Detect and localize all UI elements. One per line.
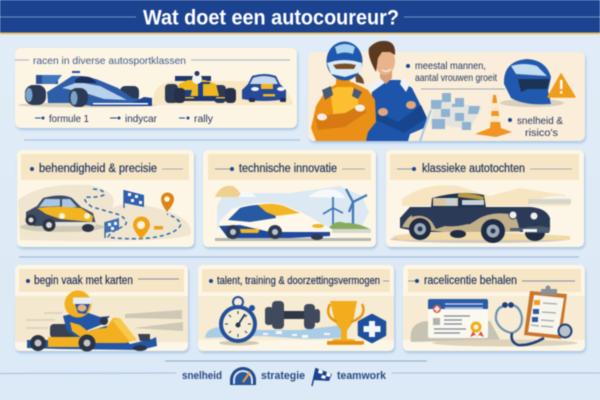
icon: stethoscoop kop <box>558 324 572 338</box>
heading: technische innovatie: technische innovatie <box>239 163 337 175</box>
heading: technische innovatie <box>215 163 365 175</box>
icon: waarschuwing <box>548 74 575 97</box>
icon: windmolens <box>323 189 367 226</box>
title banner <box>0 0 600 34</box>
icon: locatiepin klein <box>161 192 174 212</box>
icon: pion <box>475 95 512 137</box>
icon: geblokte vlag <box>420 93 482 141</box>
label: rally: rally <box>194 113 214 125</box>
icon: kart met coureur <box>27 290 157 352</box>
panel: talent, training & doorzettingsvermogen <box>198 265 394 351</box>
panel: coureurs <box>308 41 585 141</box>
panel: racelicentie behalen <box>403 265 585 351</box>
panel: klassieke autotochten <box>386 150 584 247</box>
footer: teamwork: teamwork <box>337 370 387 382</box>
icon: vlaggen <box>105 190 144 238</box>
icon: formule 1 car <box>25 71 152 107</box>
icon: coureur in oranje pak <box>311 42 376 141</box>
icon: stopwatch <box>219 297 259 346</box>
panel: racen in diverse autosportklassen <box>15 48 297 128</box>
text: meestal mannen: meestal mannen, <box>415 60 486 72</box>
heading: klassieke autotochten <box>397 163 572 175</box>
icon: stethoscoop <box>496 303 544 345</box>
label: rally <box>179 113 214 125</box>
icon: licentiekaart <box>428 299 488 338</box>
icon: schild met kruis <box>359 315 385 342</box>
label: indycar <box>110 113 157 125</box>
icon: finishvlag <box>312 368 332 386</box>
icon: snelheidsmeter <box>230 367 256 385</box>
text: snelheid en risico's: snelheid & <box>517 115 563 127</box>
icon: locatiepin groot <box>133 216 150 239</box>
footer: snelheid: snelheid <box>182 370 222 382</box>
label: formule 1: formule 1 <box>49 113 89 125</box>
panel: begin vaak met karten <box>15 265 188 352</box>
title banner: Wat doet een autocoureur? <box>143 6 399 30</box>
heading: racelicentie <box>408 275 575 287</box>
text: snelheid en risico's: risico's <box>525 127 558 139</box>
footer: strategie: strategie <box>261 370 305 382</box>
text: meestal mannen <box>406 60 497 84</box>
icon: oldtimer <box>400 193 550 243</box>
text: snelheid en risico's <box>508 115 563 139</box>
icon: trofee <box>327 301 364 345</box>
label: formule 1 <box>35 113 89 125</box>
heading: racelicentie: racelicentie behalen <box>424 275 517 287</box>
icon: rally car <box>242 74 286 102</box>
icon: helm <box>500 59 564 107</box>
icon: klembord <box>524 286 567 339</box>
icon: indycar <box>165 71 236 103</box>
icon: halter <box>265 301 320 329</box>
heading: begin vaak: begin vaak met karten <box>34 275 133 287</box>
heading: behendigheid: behendigheid & precisie <box>39 163 157 175</box>
text: meestal mannen: aantal vrouwen groeit <box>415 72 497 84</box>
label: indycar: indycar <box>125 113 157 125</box>
icon: auto <box>20 196 104 232</box>
heading: klassieke autotochten: klassieke autotochten <box>422 163 525 175</box>
icon: parcours <box>85 189 181 239</box>
heading: talent: talent, training & doorzettingsvermogen <box>217 275 380 287</box>
icon: coureur in blauw pak <box>366 41 427 141</box>
heading: racen: racen in diverse autosportklassen <box>33 55 186 67</box>
panel: technische innovatie <box>203 150 376 247</box>
panel: behendigheid & precisie <box>17 150 194 247</box>
icon: zonneauto <box>219 203 332 240</box>
